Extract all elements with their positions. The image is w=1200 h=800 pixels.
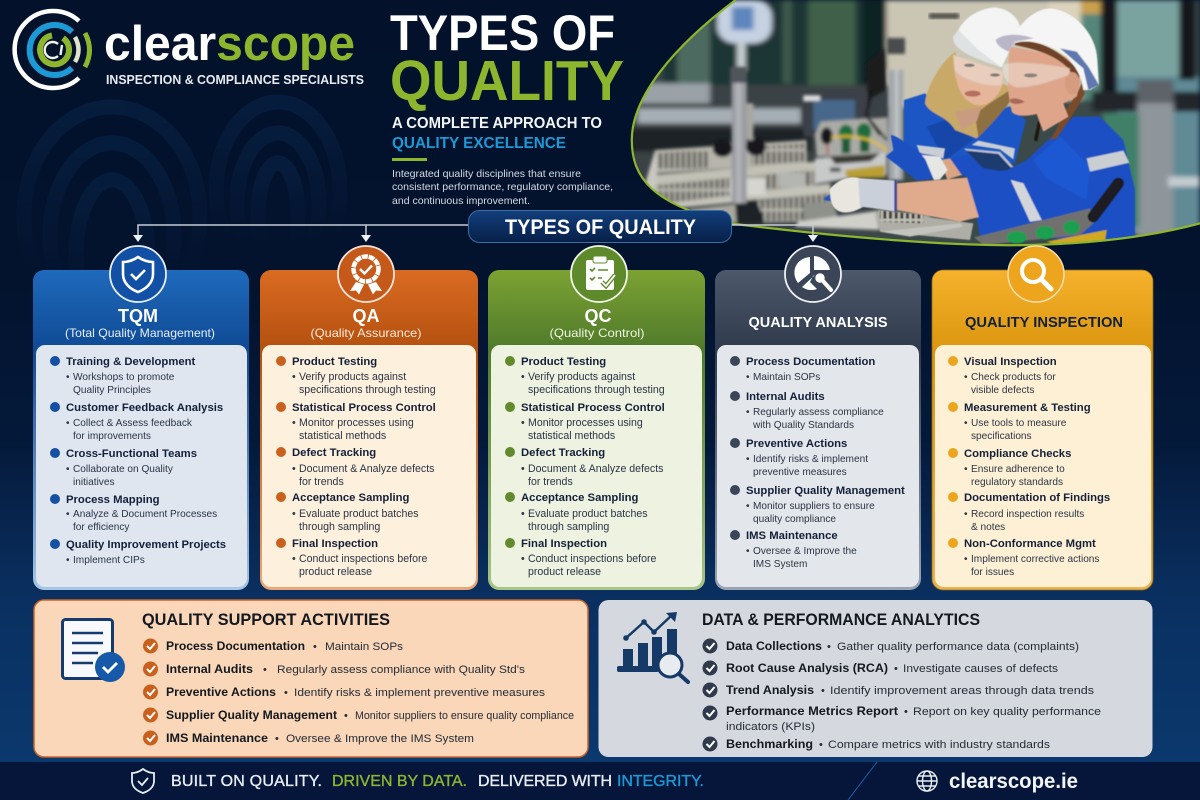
website: clearscope.ie xyxy=(949,770,1078,793)
Quality Inspection list: Implement corrective actions xyxy=(971,554,1099,565)
panel: TQM xyxy=(33,246,249,590)
checklist: • xyxy=(894,663,898,675)
checklist: IMS Maintenance xyxy=(166,731,268,745)
Quality Inspection list: • xyxy=(964,554,968,565)
Quality Inspection list: Documentation of Findings xyxy=(964,492,1110,504)
TQM list: Quality Improvement Projects xyxy=(66,539,226,551)
TQM list: • xyxy=(66,372,70,383)
Quality Analysis list: • xyxy=(746,372,750,383)
checklist: Oversee & Improve the IMS System xyxy=(286,733,474,745)
checklist: Benchmarking xyxy=(726,737,813,751)
QC list: through sampling xyxy=(528,521,609,533)
TQM list: Customer Feedback Analysis xyxy=(66,402,223,414)
Quality Analysis list: IMS Maintenance xyxy=(746,530,838,542)
Quality Analysis list: • xyxy=(746,454,750,465)
Quality Inspection list: visible defects xyxy=(971,385,1034,396)
TQM list: • xyxy=(66,418,70,429)
QA list: Monitor processes using xyxy=(299,417,414,429)
Quality Analysis list: • xyxy=(746,546,750,557)
QC list: • xyxy=(521,371,525,383)
inspector two and arms xyxy=(878,117,1135,246)
QA list: Defect Tracking xyxy=(292,447,376,459)
QC heading xyxy=(550,306,645,340)
Quality Inspection list: • xyxy=(964,372,968,383)
QC list: • xyxy=(521,417,525,429)
Quality Analysis list: Preventive Actions xyxy=(746,438,847,450)
checklist xyxy=(702,638,1101,752)
QC list: product release xyxy=(528,566,601,578)
QC list: Monitor processes using xyxy=(528,417,643,429)
TQM list: Quality Principles xyxy=(73,385,151,396)
Quality Inspection list: Measurement & Testing xyxy=(964,402,1091,414)
Quality Analysis list: Monitor suppliers to ensure xyxy=(753,501,875,512)
header photo: quality inspectors at production equipment xyxy=(630,0,1200,250)
checklist: Report on key quality performance xyxy=(913,706,1101,718)
Quality Analysis list: Regularly assess compliance xyxy=(753,407,884,418)
QA heading xyxy=(310,306,422,340)
QA list: for trends xyxy=(299,476,344,488)
QC list: Final Inspection xyxy=(521,538,607,550)
QC list: Statistical Process Control xyxy=(521,402,665,414)
TQM list: • xyxy=(66,509,70,520)
checklist: indicators (KPIs) xyxy=(726,721,815,733)
intro text: and continuous improvement. xyxy=(392,195,530,207)
TQM heading xyxy=(65,306,215,340)
Quality Inspection list xyxy=(935,345,1151,587)
QA list: Acceptance Sampling xyxy=(292,492,409,504)
Quality Analysis list: Oversee & Improve the xyxy=(753,546,857,557)
panel: QC xyxy=(488,246,705,590)
icon: award rosette xyxy=(338,246,394,302)
inspector glove xyxy=(823,177,897,213)
TQM list: Analyze & Document Processes xyxy=(73,509,217,520)
section label: types of quality xyxy=(468,210,732,242)
checklist: Compare metrics with industry standards xyxy=(828,739,1051,751)
QA list: • xyxy=(292,371,296,383)
Quality Inspection list: specifications xyxy=(971,431,1032,442)
intro text: Integrated quality disciplines that ensure xyxy=(392,168,581,180)
Quality Analysis heading: QUALITY ANALYSIS xyxy=(748,314,888,331)
QA list: Evaluate product batches xyxy=(299,508,419,520)
title: QUALITY xyxy=(390,49,624,113)
panel: data and performance analytics xyxy=(598,600,1152,757)
connector arrows from central label to cards xyxy=(133,225,818,242)
inspector one xyxy=(904,7,1026,163)
Quality Inspection list: Record inspection results xyxy=(971,509,1084,520)
checklist: • xyxy=(284,687,288,699)
Quality Analysis list: • xyxy=(746,407,750,418)
production equipment xyxy=(643,38,930,233)
QA list: Document & Analyze defects xyxy=(299,463,434,475)
subtitle: A COMPLETE APPROACH TO xyxy=(392,115,602,132)
TQM list: initiatives xyxy=(73,477,115,488)
QA heading: (Quality Assurance) xyxy=(310,326,422,340)
Quality Analysis list: quality compliance xyxy=(753,514,836,525)
TQM list: Collaborate on Quality xyxy=(73,464,174,475)
checklist: Internal Audits xyxy=(166,662,253,676)
checklist: • xyxy=(827,641,831,653)
Quality Inspection list: Ensure adherence to xyxy=(971,464,1065,475)
QA list: • xyxy=(292,417,296,429)
QC list: • xyxy=(521,463,525,475)
TQM list: Training & Development xyxy=(66,356,196,368)
intro text: consistent performance, regulatory compliance, xyxy=(392,181,613,193)
QC list: Verify products against xyxy=(528,371,635,383)
footer slogan: DELIVERED WITH xyxy=(478,773,612,790)
Quality Analysis list: IMS System xyxy=(753,559,807,570)
icon: globe xyxy=(917,771,937,791)
TQM list: • xyxy=(66,464,70,475)
checklist: Performance Metrics Report xyxy=(726,704,898,718)
checklist: • xyxy=(904,706,908,718)
Quality Inspection list: Compliance Checks xyxy=(964,448,1071,460)
checklist xyxy=(143,638,574,746)
checklist: Maintain SOPs xyxy=(325,641,404,653)
Quality Inspection list: • xyxy=(964,464,968,475)
checklist: Root Cause Analysis (RCA) xyxy=(726,661,888,675)
intro text xyxy=(392,168,613,207)
QC list xyxy=(491,345,702,587)
subtitle xyxy=(392,115,602,152)
QC list: Defect Tracking xyxy=(521,447,605,459)
QA list xyxy=(262,345,476,587)
Quality Analysis list: Internal Audits xyxy=(746,391,825,403)
Quality Inspection list: Visual Inspection xyxy=(964,356,1057,368)
TQM list: Workshops to promote xyxy=(73,372,175,383)
icon: footer shield xyxy=(132,769,154,793)
checklist: • xyxy=(821,685,825,697)
icon: pie chart with magnifier xyxy=(785,246,841,302)
QC list: for trends xyxy=(528,476,573,488)
QA list: Product Testing xyxy=(292,356,377,368)
Quality Inspection list: • xyxy=(964,418,968,429)
TQM list: • xyxy=(66,555,70,566)
QA list: through sampling xyxy=(299,521,380,533)
checklist: Regularly assess compliance with Quality Std's xyxy=(277,664,526,676)
panel: Quality Inspection xyxy=(932,246,1153,590)
QA list: Conduct inspections before xyxy=(299,553,427,565)
logo: clearscope xyxy=(15,11,364,88)
TQM heading: (Total Quality Management) xyxy=(65,326,215,340)
checklist: Monitor suppliers to ensure quality compliance xyxy=(355,710,574,722)
icon: shield with check xyxy=(110,246,166,302)
footer slogan xyxy=(171,773,704,790)
QC list: • xyxy=(521,553,525,565)
checklist: Supplier Quality Management xyxy=(166,708,337,722)
checklist: Gather quality performance data (complaints) xyxy=(837,641,1079,653)
QC list: Evaluate product batches xyxy=(528,508,648,520)
Quality Inspection list: Use tools to measure xyxy=(971,418,1067,429)
QA list: Verify products against xyxy=(299,371,406,383)
wordmark: clearscope xyxy=(104,17,355,71)
subtitle: QUALITY EXCELLENCE xyxy=(392,135,566,152)
QC heading: QC xyxy=(584,306,612,326)
section label: types of quality: TYPES OF QUALITY xyxy=(505,216,696,239)
title: TYPES OF xyxy=(390,5,615,61)
panel: quality support activities xyxy=(34,600,588,757)
logo tagline: INSPECTION & COMPLIANCE SPECIALISTS xyxy=(106,73,364,87)
Quality Inspection list: & notes xyxy=(971,522,1005,533)
footer slogan: INTEGRITY. xyxy=(617,773,704,790)
TQM list: Implement CIPs xyxy=(73,555,145,566)
TQM list xyxy=(36,345,247,587)
QA list: • xyxy=(292,463,296,475)
Quality Analysis list: Process Documentation xyxy=(746,356,875,368)
footer slogan: DRIVEN BY DATA. xyxy=(332,773,467,790)
icon: bar chart with trend line and magnifier xyxy=(617,612,688,682)
QC list: • xyxy=(521,508,525,520)
Quality Inspection list: regulatory standards xyxy=(971,477,1063,488)
QA list: Statistical Process Control xyxy=(292,402,436,414)
title xyxy=(390,5,624,113)
panel: Quality Analysis xyxy=(715,246,921,590)
icon: concentric scope mark xyxy=(15,11,89,88)
Quality Inspection list: • xyxy=(964,509,968,520)
QA list: specifications through testing xyxy=(299,384,436,396)
QC list: Conduct inspections before xyxy=(528,553,656,565)
Quality Analysis list: with Quality Standards xyxy=(752,420,854,431)
TQM list: Process Mapping xyxy=(66,494,160,506)
Quality Analysis list: Maintain SOPs xyxy=(753,372,820,383)
icon: document with check xyxy=(62,620,125,682)
checklist: • xyxy=(263,664,267,676)
QA list: product release xyxy=(299,566,372,578)
checklist: • xyxy=(275,733,279,745)
footer band xyxy=(0,762,1200,800)
QC list: Product Testing xyxy=(521,356,606,368)
Quality Analysis list: Supplier Quality Management xyxy=(746,485,905,497)
checklist: Preventive Actions xyxy=(166,685,276,699)
QA list: statistical methods xyxy=(299,430,386,442)
checklist: • xyxy=(313,641,317,653)
blurred factory background xyxy=(630,0,1200,250)
QA list: • xyxy=(292,508,296,520)
QC list: specifications through testing xyxy=(528,384,665,396)
TQM list: Cross-Functional Teams xyxy=(66,448,197,460)
QA heading: QA xyxy=(352,306,380,326)
QA list: • xyxy=(292,553,296,565)
heading: QUALITY SUPPORT ACTIVITIES xyxy=(142,610,390,629)
checklist: Investigate causes of defects xyxy=(903,663,1059,675)
checklist: Data Collections xyxy=(726,639,822,653)
Quality Analysis list: Identify risks & implement xyxy=(753,454,868,465)
footer slogan: BUILT ON QUALITY. xyxy=(171,773,322,790)
Quality Analysis list xyxy=(717,345,919,587)
panel: QA xyxy=(260,246,478,590)
checklist: Identify improvement areas through data trends xyxy=(830,685,1095,697)
Quality Analysis list: • xyxy=(746,501,750,512)
QC list: statistical methods xyxy=(528,430,615,442)
icon: magnifying glass xyxy=(1008,246,1064,302)
Quality Inspection heading: QUALITY INSPECTION xyxy=(965,314,1123,331)
checklist: • xyxy=(344,710,348,722)
Quality Inspection list: Check products for xyxy=(971,372,1056,383)
Quality Inspection list: Non-Conformance Mgmt xyxy=(964,538,1096,550)
checklist: Identify risks & implement preventive measures xyxy=(294,687,546,699)
TQM list: for improvements xyxy=(73,431,151,442)
icon: clipboard checklist xyxy=(571,246,627,302)
Quality Analysis list: preventive measures xyxy=(753,467,847,478)
TQM list: for efficiency xyxy=(73,522,130,533)
QC list: Document & Analyze defects xyxy=(528,463,663,475)
checklist: Trend Analysis xyxy=(726,683,814,697)
TQM list: Collect & Assess feedback xyxy=(73,418,193,429)
checklist: • xyxy=(819,739,823,751)
Quality Inspection list: for issues xyxy=(971,567,1014,578)
heading: DATA & PERFORMANCE ANALYTICS xyxy=(702,610,980,629)
checklist: Process Documentation xyxy=(166,639,305,653)
QA list: Final Inspection xyxy=(292,538,378,550)
QC list: Acceptance Sampling xyxy=(521,492,638,504)
QC heading: (Quality Control) xyxy=(550,326,645,340)
TQM heading: TQM xyxy=(118,306,158,326)
